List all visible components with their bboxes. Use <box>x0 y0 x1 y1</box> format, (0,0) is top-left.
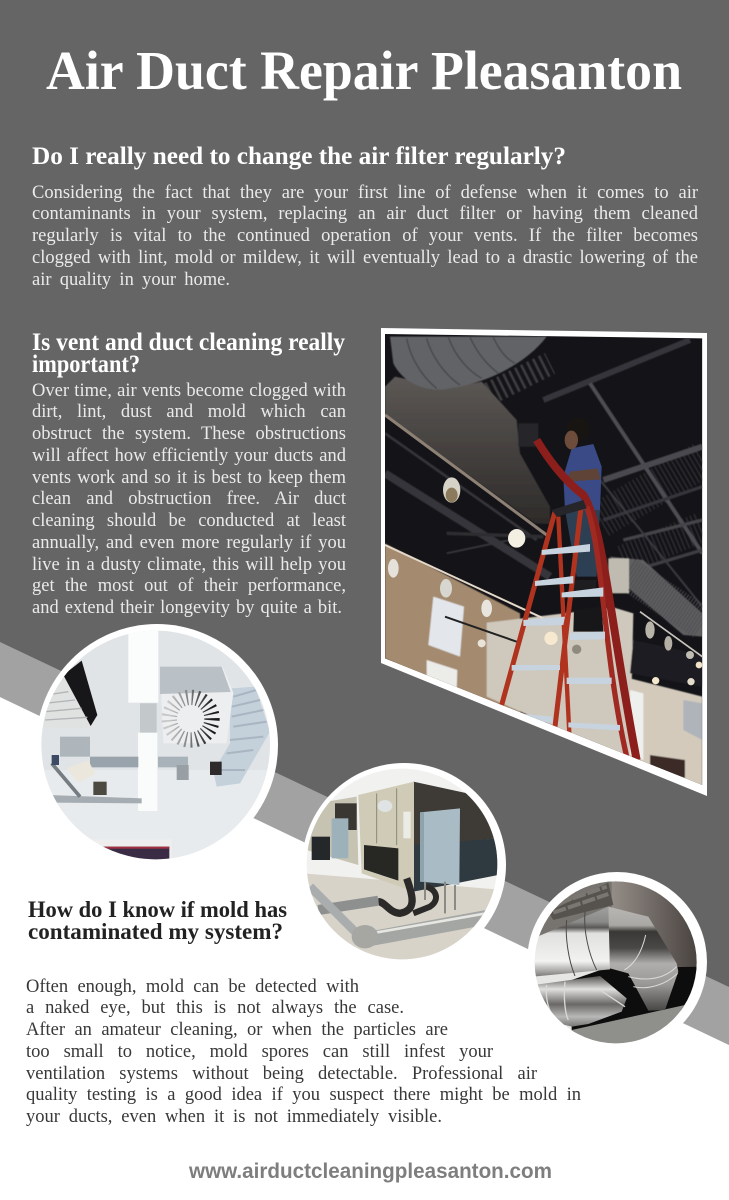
text block: vent and duct cleaning: will affect how efficiently your ducts and <box>32 446 346 466</box>
round duct <box>213 687 270 787</box>
heading: vent and duct cleaning: important? <box>32 351 140 378</box>
duct elbow <box>608 907 678 1011</box>
text block: air filter: clogged with lint, mold or mildew, it will eventually lead to a drastic lowering of the <box>32 248 698 268</box>
rear ribbed duct <box>610 557 702 637</box>
text block: mold: quality testing is a good idea if you suspect there might be mold in <box>26 1085 581 1105</box>
text block: air filter: air quality in your home. <box>32 270 230 290</box>
heading: mold: How do I know if mold has <box>28 897 287 922</box>
heading: vent and duct cleaning <box>32 329 345 378</box>
corrugated ceiling <box>600 460 702 520</box>
light tube <box>128 630 158 703</box>
concrete ledge <box>572 1005 684 1044</box>
track rails <box>385 415 702 657</box>
text block: air filter <box>32 182 698 290</box>
text block: vent and duct cleaning: dirt, lint, dust and mold which can <box>32 402 346 422</box>
ceiling diffuser <box>160 667 233 743</box>
ceiling vent <box>548 883 613 920</box>
ground <box>307 874 494 960</box>
text block: mold: too small to notice, mold spores can still infest your <box>26 1042 493 1062</box>
text block: vent and duct cleaning: Over time, air vents become clogged with <box>32 380 346 400</box>
text block: mold: Often enough, mold can be detected with <box>26 976 359 996</box>
photo: ceiling vents and round ductwork <box>33 624 280 867</box>
ladder <box>502 502 582 733</box>
pipes and rail <box>90 757 138 767</box>
walls <box>385 543 520 720</box>
lower elbow <box>533 976 627 1027</box>
large round duct <box>385 377 550 524</box>
text block: vent and duct cleaning: get the most out of their performance, <box>32 576 346 596</box>
photo: technician on ladder cleaning a duct <box>381 328 707 796</box>
hoses <box>378 878 412 913</box>
photo: stainless steel duct elbows <box>527 872 707 1052</box>
text block: mold <box>26 976 581 1127</box>
text block: vent and duct cleaning: annually, and even more regularly if you <box>32 533 346 553</box>
white lower section <box>0 697 729 1200</box>
main unit <box>413 782 498 847</box>
hose <box>537 440 637 760</box>
text block: vent and duct cleaning: clean and obstruction free. Air duct <box>32 489 346 509</box>
dark void <box>572 967 700 1033</box>
main duct <box>533 907 610 977</box>
text block: vent and duct cleaning <box>32 380 346 618</box>
title: Air Duct Repair Pleasanton <box>46 40 682 101</box>
text block: air filter: regularly is vital to the continued operation of your vents. If the filter becomes <box>32 226 698 246</box>
text block: vent and duct cleaning: cleaning should be conducted at least <box>32 511 346 531</box>
rear unit <box>307 797 358 865</box>
text block: mold: ventilation systems without being detectable. Professional air <box>26 1064 537 1084</box>
text block: air filter: contaminants in your system, replacing an air duct filter or having them cleaned <box>32 204 698 224</box>
text block: mold: your ducts, even when it is not immediately visible. <box>26 1107 442 1127</box>
heading: vent and duct cleaning: Is vent and duct cleaning really <box>32 329 345 356</box>
footer website address: www.airductcleaningpleasanton.com <box>188 1160 552 1183</box>
wall <box>605 878 700 970</box>
text block: vent and duct cleaning: and extend their longevity by quite a bit. <box>32 598 342 618</box>
heading: mold <box>28 897 287 944</box>
person <box>563 418 603 632</box>
ceiling joists <box>385 340 702 607</box>
electrical box <box>420 808 460 885</box>
text block: mold: a naked eye, but this is not always the case. <box>26 998 404 1018</box>
track lights <box>388 477 702 685</box>
heading: air filter: Do I really need to change the air filter regularly? <box>32 143 566 170</box>
text block: mold: After an amateur cleaning, or when the particles are <box>26 1020 448 1040</box>
insulated pipes <box>318 901 378 910</box>
photo: rooftop air conditioning units <box>302 763 506 967</box>
cassette unit <box>44 678 64 722</box>
text block: air filter: Considering the fact that they are your first line of defense when it comes to air <box>32 182 698 202</box>
text block: vent and duct cleaning: live in a dusty climate, this will help you <box>32 554 346 574</box>
bottom frame <box>93 839 172 859</box>
light grey diagonal band <box>0 642 729 1045</box>
text block: vent and duct cleaning: vents work and so it is best to keep them <box>32 468 346 488</box>
heading: mold: contaminated my system? <box>28 919 283 944</box>
text block: vent and duct cleaning: obstruct the system. These obstructions <box>32 424 346 444</box>
